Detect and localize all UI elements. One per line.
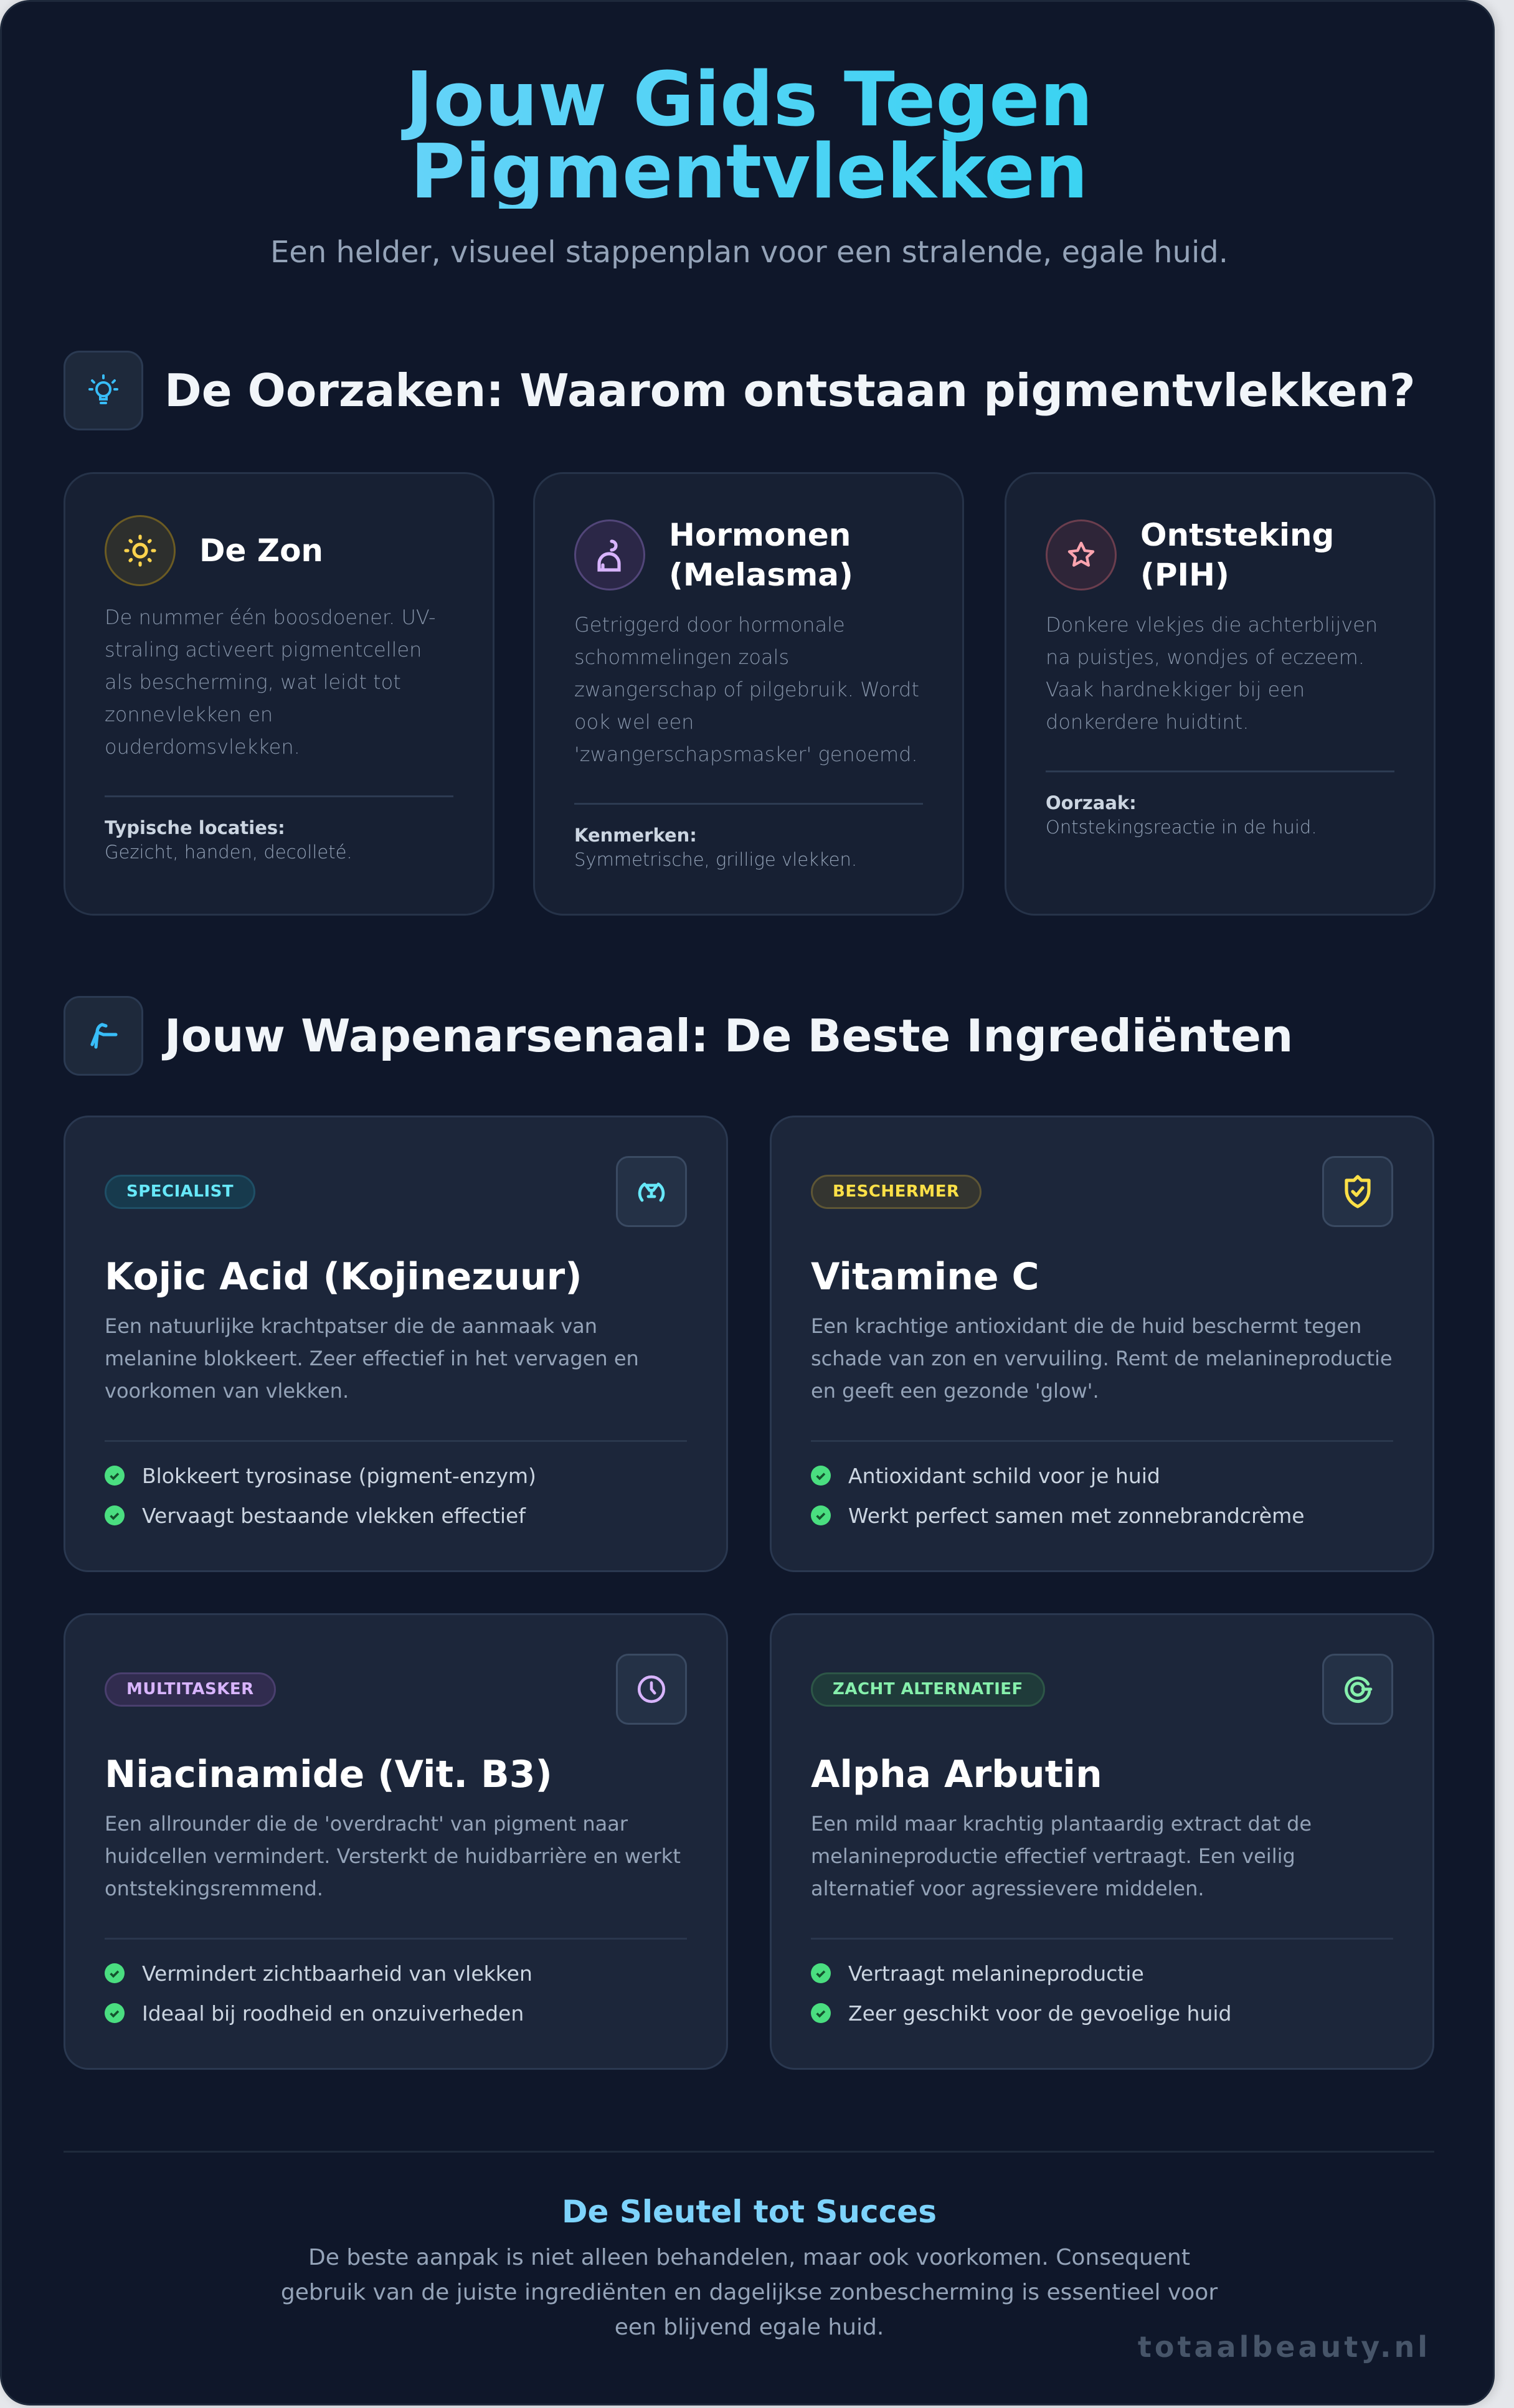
- panel: Niacinamide: Een allrounder die de 'overdracht' van pigment naar huidcellen vermindert. Versterkt de huidbarrière en werkt ontstekingsremmend.: [105, 1812, 681, 1900]
- section heading: causes: De Oorzaken: Waarom ontstaan pigmentvlekken?: [164, 364, 1416, 417]
- icon: person: [574, 519, 645, 590]
- title: Jouw Gids Tegen: [405, 57, 1093, 143]
- panel: Hormonen: Hormonen: [669, 517, 851, 553]
- icon: flask: [616, 1156, 687, 1227]
- panel: De Zon: De nummer één boosdoener. UV-straling activeert pigmentcellen als bescherming, wat leidt tot zonnevlekken en ouderdomsvlekken.: [105, 605, 435, 759]
- panel: Ontsteking: Ontsteking: [1140, 517, 1334, 553]
- badge: multitasker: [105, 1672, 276, 1707]
- panel: Vitamine C: Werkt perfect samen met zonnebrandcrème: [848, 1504, 1305, 1527]
- panel: Hormonen: (Melasma): [669, 557, 853, 593]
- panel: Alpha Arbutin: Een mild maar krachtig plantaardig extract dat de melanineproductie effectief vertraagt. Een veilig alternatief voor agressievere middelen.: [811, 1812, 1312, 1900]
- panel: Niacinamide: Ideaal bij roodheid en onzuiverheden: [142, 2001, 524, 2026]
- icon: shield: [1322, 1156, 1393, 1227]
- footer heading: De Sleutel tot Succes: [562, 2194, 937, 2230]
- icon: clock: [616, 1654, 687, 1725]
- badge: specialist: SPECIALIST: [126, 1182, 234, 1201]
- badge: beschermer: BESCHERMER: [833, 1182, 960, 1201]
- panel: Alpha Arbutin: Alpha Arbutin: [811, 1753, 1102, 1796]
- panel: Ontsteking: (PIH): [1140, 557, 1229, 593]
- panel: Kojic Acid: Blokkeert tyrosinase (pigment-enzym): [142, 1464, 536, 1487]
- panel: Ontsteking: Donkere vlekjes die achterblijven na puistjes, wondjes of eczeem. Vaak hardnekkiger bij een donkerdere huidtint.: [1046, 613, 1378, 734]
- panel: Hormonen: [533, 472, 964, 916]
- panel: Vitamine C: Vitamine C: [811, 1255, 1039, 1299]
- panel: De Zon: Typische locaties:: [105, 817, 285, 838]
- panel: Ontsteking: Ontstekingsreactie in de huid.: [1046, 817, 1317, 838]
- panel: Kojic Acid: Kojic Acid (Kojinezuur): [105, 1255, 582, 1299]
- watermark: totaalbeauty.nl: [1138, 2330, 1431, 2364]
- badge: multitasker: MULTITASKER: [126, 1680, 254, 1699]
- badge: zacht alternatief: [811, 1672, 1045, 1707]
- icon: leaf swirl: [1322, 1654, 1393, 1725]
- panel: Vitamine C: [770, 1116, 1434, 1572]
- panel: De Zon: Gezicht, handen, decolleté.: [105, 841, 352, 863]
- panel: Niacinamide: Vermindert zichtbaarheid van vlekken: [142, 1961, 532, 1986]
- title: Pigmentvlekken: [410, 129, 1088, 216]
- panel: Niacinamide: Niacinamide (Vit. B3): [105, 1753, 552, 1796]
- icon: lightbulb: [64, 351, 143, 430]
- badge: specialist: [105, 1175, 255, 1208]
- panel: De Zon: [64, 472, 494, 916]
- panel: Alpha Arbutin: Zeer geschikt voor de gevoelige huid: [848, 2001, 1231, 2026]
- icon: star: [1046, 519, 1117, 590]
- section heading: ingredients: [64, 996, 1293, 1076]
- panel: Kojic Acid: [64, 1116, 728, 1572]
- panel: Hormonen: Kenmerken:: [574, 825, 697, 846]
- icon: sun: [105, 515, 176, 586]
- panel: Kojic Acid: Een natuurlijke krachtpatser die de aanmaak van melanine blokkeert. Zeer effectief in het vervagen en voorkomen van vlekken.: [105, 1314, 639, 1403]
- panel: Kojic Acid: Vervaagt bestaande vlekken effectief: [142, 1504, 526, 1527]
- badge: beschermer: [811, 1175, 982, 1208]
- section heading: ingredients: Jouw Wapenarsenaal: De Beste Ingrediënten: [164, 1010, 1293, 1062]
- footer text: De beste aanpak is niet alleen behandelen, maar ook voorkomen. Consequent gebruik van de juiste ingrediënten en dagelijkse zonbescherming is essentieel voor een blijvend egale huid.: [281, 2245, 1218, 2340]
- panel: Alpha Arbutin: [770, 1613, 1434, 2070]
- panel: Hormonen: Symmetrische, grillige vlekken.: [574, 849, 857, 870]
- panel: Ontsteking: Oorzaak:: [1046, 792, 1137, 813]
- panel: Vitamine C: Een krachtige antioxidant die de huid beschermt tegen schade van zon en vervuiling. Remt de melanineproductie en geeft een gezonde 'glow'.: [811, 1314, 1393, 1403]
- subtitle: Een helder, visueel stappenplan voor een stralende, egale huid.: [270, 235, 1228, 270]
- panel: Hormonen: Getriggerd door hormonale schommelingen zoals zwangerschap of pilgebruik. Wordt ook wel een 'zwangerschapsmasker' genoemd.: [574, 613, 919, 766]
- panel: Niacinamide: [64, 1613, 728, 2070]
- icon: figure: [64, 996, 143, 1076]
- panel: Alpha Arbutin: Vertraagt melanineproductie: [848, 1961, 1144, 1986]
- badge: zacht alternatief: ZACHT ALTERNATIEF: [833, 1680, 1023, 1699]
- panel: Ontsteking: [1005, 472, 1436, 916]
- panel: Vitamine C: Antioxidant schild voor je huid: [848, 1464, 1160, 1487]
- panel: De Zon: De Zon: [199, 533, 323, 569]
- title: [2, 64, 1497, 209]
- section heading: causes: [64, 351, 1416, 430]
